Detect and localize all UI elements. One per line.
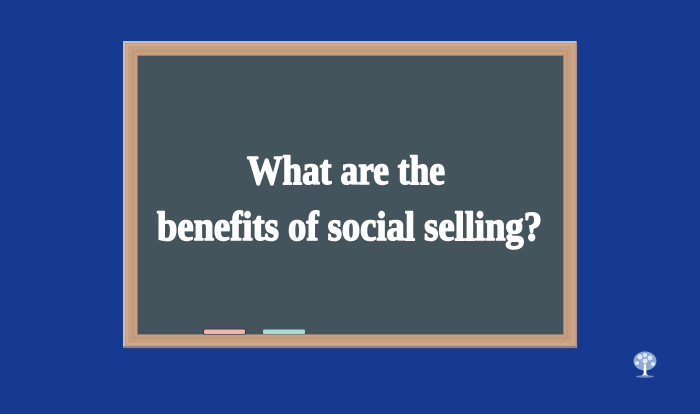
panel: chalkboard bbox=[123, 41, 578, 349]
heading: What are the bbox=[247, 147, 445, 193]
wooden frame bbox=[123, 41, 578, 349]
pink chalk bbox=[203, 328, 246, 334]
icon: white tree logo bbox=[634, 352, 656, 378]
teal chalk bbox=[263, 330, 305, 334]
heading: benefits of social selling? bbox=[157, 203, 542, 249]
slate writing surface bbox=[137, 55, 564, 335]
heading bbox=[157, 147, 542, 249]
